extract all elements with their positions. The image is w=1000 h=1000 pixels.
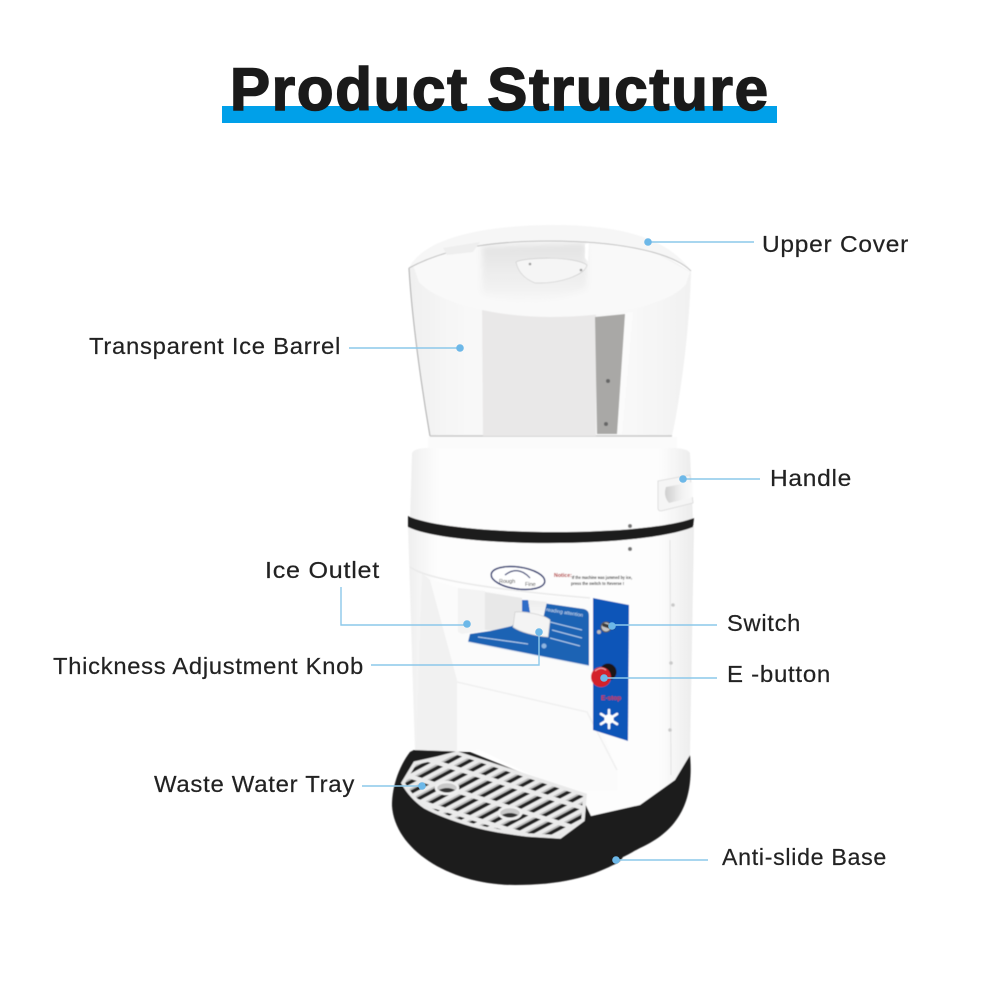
callout: waste water tray: Waste Water Tray [154,771,355,797]
callout: switch: Switch [727,610,801,636]
callout: ice outlet: Ice Outlet [265,557,380,583]
collar [428,437,677,449]
callout: transparent ice barrel [89,333,464,359]
callout: anti-slide base: Anti-slide Base [722,844,887,870]
callout: transparent ice barrel: Transparent Ice Barrel [89,333,341,359]
callout: e-button: E -button [727,661,831,687]
dispenser recess [410,567,617,790]
snowflake icon [601,710,617,728]
waste water tray grid [400,751,587,840]
thickness knob [513,600,550,637]
notice text: press the switch to Reverse ! [571,581,624,586]
callout: handle [679,465,852,491]
callout: ice outlet [265,557,471,628]
callout: e-button [600,661,831,687]
side screws [666,603,675,792]
callout: upper cover [644,231,909,257]
motor housing [410,448,693,536]
blue instruction sticker: reading attention [546,607,584,619]
rough fine dial label [490,563,546,593]
anti-slide base [392,750,691,885]
rough fine dial label: Fine [525,582,536,588]
callout: handle: Handle [770,465,852,491]
callout: thickness adjustment knob: Thickness Adjustment Knob [53,653,364,679]
ice barrel [409,240,691,436]
emergency stop button [591,664,621,702]
title: Product Structure [230,56,768,123]
notice text [554,573,632,586]
product: ice shaver machine [392,225,694,885]
callout: thickness adjustment knob [53,628,543,679]
blue instruction sticker [468,600,589,666]
notice text: If the machine was jammed by ice, [572,575,632,580]
handle [658,475,693,511]
callout: switch [608,610,801,636]
upper cover [409,225,691,271]
black ring [408,516,694,543]
emergency stop button: E-stop [601,695,621,702]
toggle switch [597,622,613,634]
blue control panel [591,598,629,741]
callout: upper cover: Upper Cover [762,231,909,257]
notice text: Notice: [554,573,572,579]
callout: anti-slide base [612,844,887,870]
rough fine dial label: Rough [499,579,515,585]
lower body [408,526,694,816]
